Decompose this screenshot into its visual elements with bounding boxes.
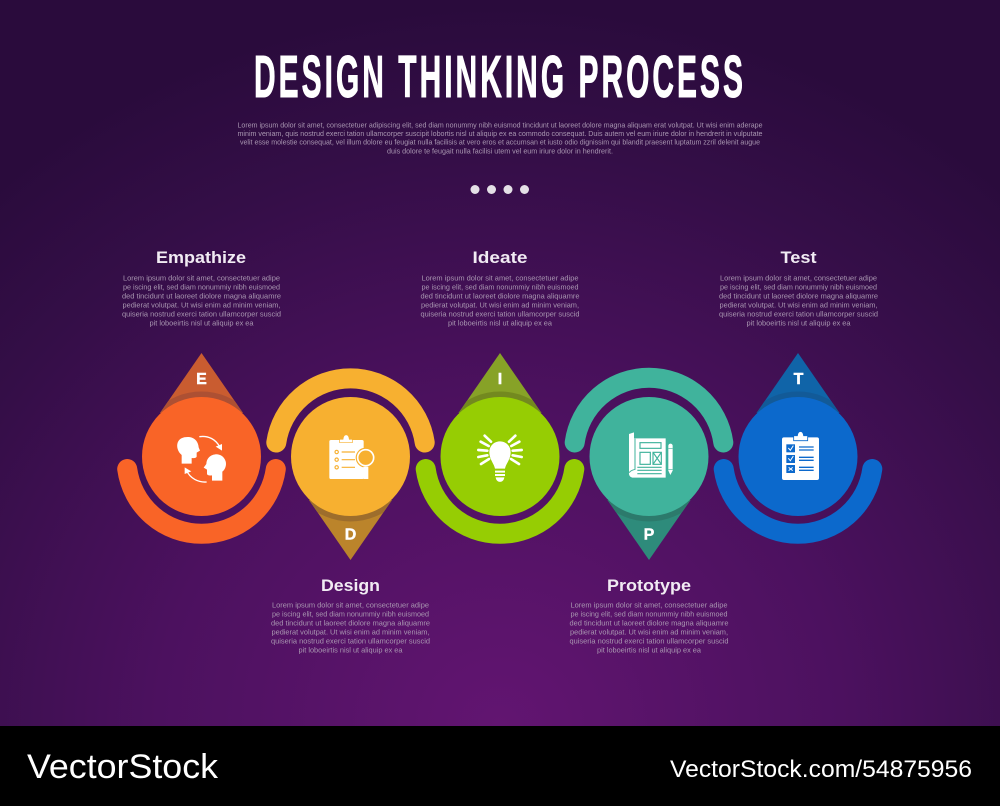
- footer bar: [0, 726, 1000, 806]
- body: Ideate: pedierat volutpat. Ut wisi enim ad minim veniam,: [421, 300, 579, 310]
- arc D: [276, 378, 425, 442]
- body: Ideate: quiseria nostrud exerci tation ullamcorper suscid: [420, 310, 580, 318]
- footer logo: VectorStock: [27, 748, 219, 786]
- heading: Design: Design: [321, 577, 380, 595]
- body: Ideate: ded tincidunt ut laoreet diolore magna aliquamre: [420, 292, 580, 300]
- pointer triangle D: [309, 500, 392, 560]
- body: Prototype: pe iscing elit, sed diam nonummiy nibh euismoed: [570, 610, 728, 618]
- circle I: [440, 397, 560, 516]
- pointer triangle T: [756, 353, 840, 413]
- intro text: velit esse molestie consequat, vel illum dolore eu feugiat nulla facilisis at vero eros et accumsan et iusto odio dignissim qui blandit praesent luptatum zzril delenit augue: [240, 138, 760, 147]
- icon: checklist clipboard: [782, 431, 819, 480]
- arc I: [426, 469, 574, 534]
- letter I: I: [498, 371, 502, 388]
- body: Design: ded tincidunt ut laoreet diolore magna aliquamre: [271, 618, 430, 628]
- intro text: minim veniam, quis nostrud exerci tation ullamcorper suscipit lobortis nisl ut aliquip ex ea commodo consequat. Duis autem vel eum iriure dolor in hendrerit in vulputate: [238, 129, 762, 138]
- body: Test: ded tincidunt ut laoreet diolore magna aliquamre: [719, 292, 878, 300]
- pagination dots: [470, 185, 529, 194]
- body: Empathize: ded tincidunt ut laoreet diolore magna aliquamre: [122, 292, 281, 300]
- body: Design: pedierat volutpat. Ut wisi enim ad minim veniam,: [272, 628, 430, 636]
- body: Design: pit loboeirtis nisl ut aliquip ex ea: [298, 646, 402, 654]
- icon: light bulb: [478, 436, 522, 482]
- intro text: duis dolore te feugait nulla facilisi utem vel eum iriure dolor in hendrerit.: [387, 146, 613, 155]
- panel: Design text: [271, 577, 430, 654]
- circle D: [291, 397, 410, 516]
- circle P: [590, 397, 708, 516]
- step I: Ideate graphic: [426, 353, 574, 534]
- body: Empathize: quiseria nostrud exerci tation ullamcorper suscid: [122, 310, 281, 318]
- body: Empathize: Lorem ipsum dolor sit amet, consectetuer adipe: [123, 274, 280, 282]
- intro text: Lorem ipsum dolor sit amet, consectetuer adipiscing elit, sed diam nonummy nibh euismod tincidunt ut laoreet dolore magna aliquam erat volutpat. Ut wisi enim aderape: [238, 120, 762, 129]
- icon: blueprint and pencil: [629, 432, 673, 478]
- body: Design: quiseria nostrud exerci tation ullamcorper suscid: [271, 636, 430, 646]
- arc P: [575, 378, 723, 442]
- body: Design: pe iscing elit, sed diam nonummiy nibh euismoed: [272, 610, 429, 618]
- body: Prototype: pit loboeirtis nisl ut aliquip ex ea: [597, 646, 701, 654]
- body: Prototype: Lorem ipsum dolor sit amet, consectetuer adipe: [570, 600, 728, 610]
- heading: Ideate: Ideate: [472, 249, 528, 267]
- arc T: [724, 469, 872, 534]
- body: Ideate: [420, 274, 580, 328]
- pointer triangle I: [458, 353, 542, 413]
- panel: Prototype text: [570, 577, 728, 654]
- letter T: T: [794, 371, 804, 388]
- body: Empathize: [122, 274, 281, 328]
- body: Empathize: pit loboeirtis nisl ut aliquip ex ea: [150, 318, 254, 328]
- body: Prototype: quiseria nostrud exerci tation ullamcorper suscid: [570, 636, 728, 646]
- panel: Empathize text: [122, 249, 281, 328]
- step T: Test graphic: [724, 353, 872, 534]
- body: Ideate: pit loboeirtis nisl ut aliquip ex ea: [448, 318, 552, 328]
- body: Prototype: [570, 600, 728, 654]
- heading: Prototype: Prototype: [607, 577, 691, 595]
- body: Design: Lorem ipsum dolor sit amet, consectetuer adipe: [272, 600, 429, 610]
- arc E: [127, 469, 276, 534]
- body: Ideate: pe iscing elit, sed diam nonummiy nibh euismoed: [422, 282, 579, 292]
- heading: Test: Test: [780, 249, 817, 267]
- pointer triangle E: [160, 353, 243, 413]
- icon: clipboard with magnifier: [329, 435, 376, 479]
- body: Empathize: pedierat volutpat. Ut wisi enim ad minim veniam,: [122, 300, 280, 310]
- pointer triangle P: [608, 500, 690, 560]
- letter P: P: [644, 526, 655, 544]
- body: Prototype: pedierat volutpat. Ut wisi enim ad minim veniam,: [570, 628, 728, 636]
- icon: two heads with arrows: [177, 436, 226, 482]
- step D: Design graphic: [276, 378, 425, 560]
- body: Ideate: Lorem ipsum dolor sit amet, consectetuer adipe: [422, 274, 578, 282]
- body: Test: pedierat volutpat. Ut wisi enim ad minim veniam,: [720, 300, 878, 310]
- body: Prototype: ded tincidunt ut laoreet diolore magna aliquamre: [570, 618, 728, 628]
- body: Test: pe iscing elit, sed diam nonummiy nibh euismoed: [720, 282, 877, 292]
- letter D: D: [345, 526, 356, 544]
- circle T: [738, 397, 858, 516]
- body: Test: pit loboeirtis nisl ut aliquip ex ea: [746, 318, 850, 328]
- body: Test: Lorem ipsum dolor sit amet, consectetuer adipe: [720, 274, 877, 282]
- step E: Empathize graphic: [127, 353, 276, 534]
- body: Empathize: pe iscing elit, sed diam nonummiy nibh euismoed: [123, 282, 280, 292]
- body: Test: quiseria nostrud exerci tation ullamcorper suscid: [719, 310, 878, 318]
- panel: Test text: [719, 249, 878, 328]
- letter E: E: [196, 371, 207, 388]
- body: Test: [719, 274, 878, 328]
- panel: Ideate text: [420, 249, 580, 328]
- footer url: VectorStock.com/54875956: [670, 756, 972, 783]
- heading: Empathize: Empathize: [156, 249, 246, 267]
- intro text: [238, 120, 762, 155]
- step P: Prototype graphic: [575, 378, 723, 560]
- circle E: [142, 397, 261, 516]
- body: Design: [271, 600, 430, 654]
